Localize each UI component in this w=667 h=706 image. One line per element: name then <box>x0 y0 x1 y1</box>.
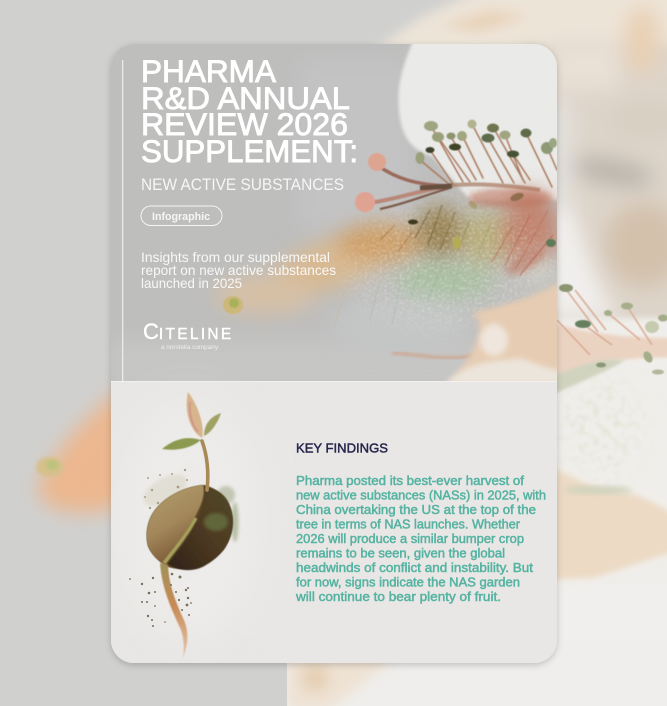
top petal <box>372 0 667 130</box>
pollen streaks <box>335 205 553 325</box>
leaves <box>162 392 221 450</box>
key findings body text: Pharma posted its best-ever harvest of <box>296 473 524 488</box>
illustration: sprouting seed <box>129 392 238 660</box>
tag: infographic: Infographic <box>152 211 210 223</box>
bean <box>147 485 233 569</box>
title: REVIEW 2026 <box>141 106 348 142</box>
stamens <box>420 124 557 187</box>
title: PHARMA <box>141 53 276 89</box>
key findings body text: new active substances (NASs) in 2025, with <box>296 488 546 502</box>
stamen band <box>550 322 667 380</box>
title <box>141 53 358 169</box>
heading: key findings: KEY FINDINGS <box>296 442 388 456</box>
bottom petal <box>287 663 522 706</box>
red pollen <box>468 188 552 208</box>
white petal <box>398 38 570 200</box>
stamen heads <box>408 120 557 249</box>
key findings body text: will continue to bear plenty of fruit. <box>295 589 501 604</box>
vertical rule <box>122 60 123 381</box>
logo: Citeline: CITELINE <box>143 319 234 344</box>
key findings body text: tree in terms of NAS launches. Whether <box>296 516 521 532</box>
panel: header with flower photo <box>111 38 570 390</box>
stem <box>202 441 208 490</box>
intro text: report on new active substances <box>141 262 336 278</box>
key findings body text: China overtaking the US at the top of the <box>296 502 536 517</box>
tag: infographic <box>141 206 222 226</box>
logo: Citeline: a norstella company <box>161 344 219 351</box>
root <box>160 563 187 660</box>
key findings body text: for now, signs indicate the NAS garden <box>296 574 520 590</box>
dust halo <box>138 468 238 542</box>
peach petal <box>455 282 557 376</box>
panel: key findings background <box>111 381 557 663</box>
intro text: launched in 2025 <box>141 275 242 291</box>
small green pollen spot <box>223 296 243 314</box>
upper right blurred petals <box>520 45 667 325</box>
pink stamens <box>355 153 540 212</box>
lower right petal and mottling <box>520 318 667 706</box>
key findings body text <box>295 473 546 604</box>
mottled pollen texture <box>380 188 483 250</box>
orange smear with pollen at left <box>36 385 125 513</box>
subtitle: NEW ACTIVE SUBSTANCES <box>141 175 344 194</box>
colour washes <box>215 190 562 351</box>
key findings body text: headwinds of conflict and instability. But <box>296 560 533 575</box>
title: R&D ANNUAL <box>141 80 350 116</box>
key findings body text: 2026 will produce a similar bumper crop <box>296 531 524 546</box>
card <box>111 38 570 663</box>
red underline of gray petal <box>392 353 475 358</box>
intro text <box>141 249 336 291</box>
intro text: Insights from our supplemental <box>141 249 330 265</box>
key findings body text: remains to be seen, given the global <box>296 546 505 560</box>
title: SUPPLEMENT: <box>141 133 358 169</box>
soil specks <box>129 573 192 627</box>
